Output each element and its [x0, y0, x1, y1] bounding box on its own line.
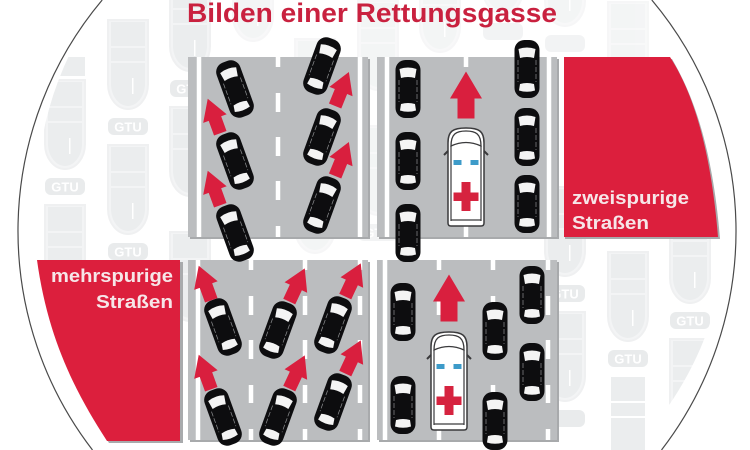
- arrow: [450, 72, 482, 118]
- watermark: GTU logo pattern: GTU: [176, 82, 204, 96]
- watermark: GTU logo pattern: GTU: [364, 226, 392, 240]
- ambulance: [427, 332, 471, 430]
- watermark: GTU logo pattern: GTU: [51, 180, 79, 194]
- left cars: [213, 57, 257, 265]
- ambulance: [444, 128, 488, 226]
- label: zweispurige Straßen: zweispurige: [572, 187, 689, 208]
- right cars: [300, 34, 344, 237]
- arrow: [433, 274, 465, 322]
- label: zweispurige Straßen: Straßen: [572, 212, 649, 233]
- cars: [390, 266, 544, 450]
- panel: multi-lane road, emergency lane open: [377, 260, 559, 450]
- cars at road edges: [396, 40, 540, 262]
- red arrows: [196, 67, 360, 209]
- panel: two-lane road, emergency lane open: [377, 40, 559, 262]
- label: mehrspurige Straßen: mehrspurige: [51, 265, 173, 286]
- label: zweispurige Straßen: [564, 57, 720, 239]
- watermark: GTU logo pattern: GTU: [551, 286, 579, 302]
- watermark: GTU logo pattern: GTU: [614, 352, 642, 366]
- label: mehrspurige Straßen: [37, 260, 183, 443]
- panel: multi-lane road, cars moving aside: [187, 258, 372, 449]
- red arrows: [187, 258, 372, 394]
- cars: [201, 293, 355, 449]
- label: mehrspurige Straßen: Straßen: [96, 291, 173, 312]
- watermark: GTU logo pattern: GTU: [114, 120, 142, 134]
- watermark: GTU logo pattern: GTU: [676, 314, 704, 328]
- watermark: GTU logo pattern: GTU: [114, 244, 142, 260]
- panel: two-lane road, cars moving aside: [188, 34, 370, 265]
